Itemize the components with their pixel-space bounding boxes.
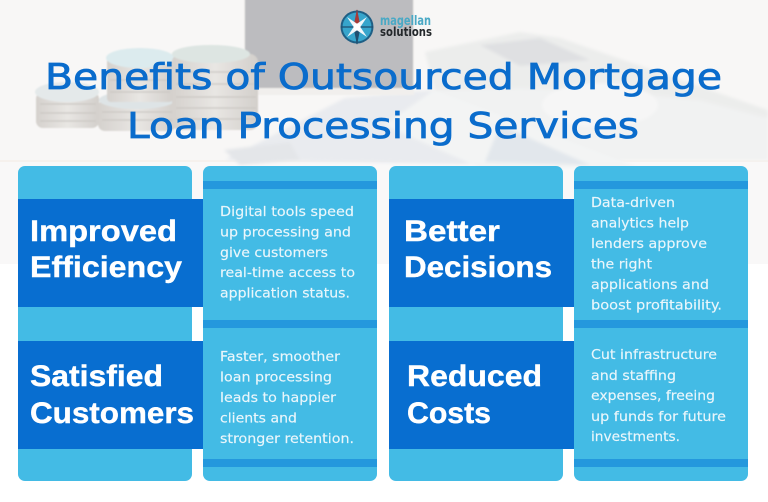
text: Better Decisions description: Data-driven [591, 195, 675, 211]
text: Better Decisions description: lenders approve [591, 236, 707, 252]
title [45, 57, 722, 147]
text: Satisfied Customers description: stronger retention. [220, 431, 354, 447]
heading: Improved Efficiency [18, 199, 203, 307]
text: Satisfied Customers description: Faster, smoother [220, 349, 340, 365]
panel: left column descriptions [203, 166, 377, 481]
logo wordmark: magellan [380, 14, 431, 29]
heading: Better Decisions [389, 199, 574, 307]
title: Benefits of Outsourced Mortgage [45, 57, 722, 98]
text: Improved Efficiency description: up processing and [220, 224, 351, 240]
heading: Satisfied Customers: Customers [30, 397, 194, 430]
icon: compass [340, 9, 374, 45]
text: Better Decisions description [591, 195, 722, 314]
coins [35, 45, 258, 131]
heading: Reduced Costs: Costs [407, 397, 491, 430]
heading: Reduced Costs [389, 341, 574, 449]
text: Reduced Costs description: and staffing [591, 368, 676, 384]
text: Better Decisions description: boost profitability. [591, 298, 722, 314]
text: Better Decisions description: applications and [591, 277, 709, 293]
logo wordmark [380, 14, 432, 39]
heading: Satisfied Customers [18, 341, 203, 449]
text: Reduced Costs description: up funds for future [591, 409, 726, 425]
panel: right column descriptions [574, 166, 748, 481]
text: Improved Efficiency description: give customers [220, 245, 328, 261]
text: Improved Efficiency description: real-time access to [220, 265, 355, 281]
text: Satisfied Customers description: loan processing [220, 370, 332, 386]
heading: Better Decisions: Decisions [404, 251, 552, 284]
text: Satisfied Customers description [220, 349, 354, 447]
text: Satisfied Customers description: clients and [220, 410, 297, 426]
text: Better Decisions description: the right [591, 256, 652, 272]
text: Reduced Costs description: expenses, freeing [591, 388, 715, 404]
heading: Better Decisions: Better [404, 215, 500, 248]
text: Improved Efficiency description [220, 204, 355, 302]
heading: Improved Efficiency: Efficiency [30, 251, 182, 284]
phone [244, 0, 414, 95]
heading: Improved Efficiency: Improved [30, 215, 177, 248]
panel: left column background [18, 166, 192, 481]
text: Better Decisions description: analytics help [591, 216, 689, 232]
logo: Magellan Solutions [340, 9, 432, 45]
text: Improved Efficiency description: application status. [220, 286, 350, 302]
text: Reduced Costs description: investments. [591, 429, 680, 445]
text: Satisfied Customers description: leads to happier [220, 390, 336, 406]
logo wordmark: solutions [380, 25, 432, 39]
background photo: coins, phone and banknotes [0, 0, 768, 264]
text: Reduced Costs description: Cut infrastructure [591, 347, 717, 363]
panel: right column background [389, 166, 563, 481]
title: Loan Processing Services [127, 106, 639, 147]
heading: Reduced Costs: Reduced [407, 360, 542, 393]
heading: Satisfied Customers: Satisfied [30, 360, 163, 393]
text: Reduced Costs description [591, 347, 726, 445]
text: Improved Efficiency description: Digital tools speed [220, 204, 354, 220]
